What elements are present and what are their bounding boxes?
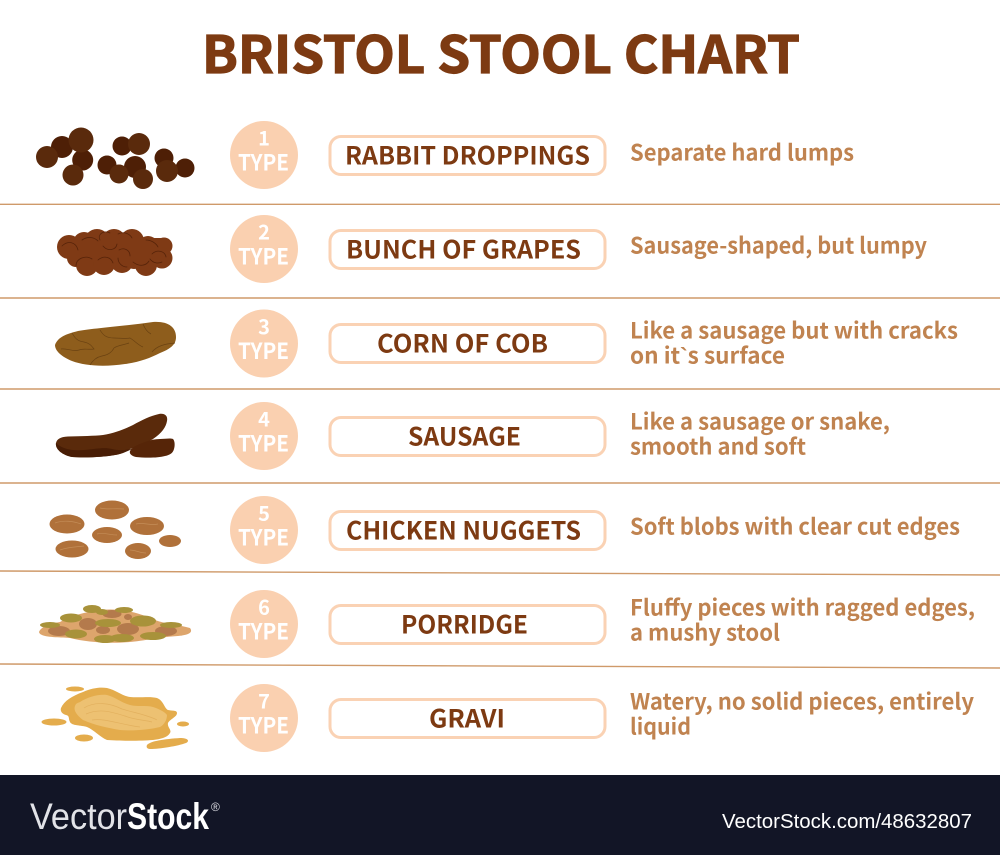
type badge 7: 7 xyxy=(258,686,270,714)
type badge 5: 5 xyxy=(258,498,270,526)
icon: soft blobs xyxy=(50,500,181,559)
row 4: sausage xyxy=(56,402,890,470)
row 3: corn of cob xyxy=(55,310,958,378)
icon: lumpy sausage xyxy=(57,229,172,276)
label: sausage xyxy=(330,418,605,456)
type badge 2: 2 xyxy=(258,216,270,246)
footer logo xyxy=(30,796,209,837)
type badge 4: 4 xyxy=(258,404,270,432)
description 5: Soft blobs with clear cut edges xyxy=(630,510,960,542)
type badge 7 xyxy=(230,684,298,752)
title: BRISTOL STOOL CHART xyxy=(202,14,800,88)
label: sausage: SAUSAGE xyxy=(408,418,521,454)
row 2: bunch of grapes xyxy=(57,215,927,283)
type badge 3: TYPE xyxy=(238,334,289,366)
type badge 3 xyxy=(230,310,298,378)
type badge 6 xyxy=(230,590,298,658)
description 3: Like a sausage but with cracks xyxy=(630,314,958,346)
icon: mushy pile xyxy=(39,605,191,643)
type badge 2: TYPE xyxy=(238,240,289,272)
description 4: smooth and soft xyxy=(630,430,807,462)
icon: liquid puddle xyxy=(42,686,189,749)
label: corn of cob: CORN OF COB xyxy=(377,324,548,360)
label: gravi: GRAVI xyxy=(429,700,505,736)
label: porridge: PORRIDGE xyxy=(401,606,528,642)
description 6: Fluffy pieces with ragged edges, xyxy=(630,590,975,622)
type badge 7: TYPE xyxy=(238,708,289,740)
label: bunch of grapes: BUNCH OF GRAPES xyxy=(346,230,581,266)
registered mark: ® xyxy=(211,800,220,814)
type badge 1 xyxy=(230,121,298,189)
label: gravi xyxy=(330,700,605,738)
icon: smooth sausage xyxy=(56,414,175,458)
type badge 4: TYPE xyxy=(238,426,289,458)
description 6: a mushy stool xyxy=(630,616,780,648)
description 3 xyxy=(630,314,958,370)
icon: hard separate lumps xyxy=(36,128,194,189)
row 1: rabbit droppings xyxy=(36,121,854,189)
description 7: liquid xyxy=(630,710,691,742)
label: rabbit droppings: RABBIT DROPPINGS xyxy=(345,136,590,172)
description 7: Watery, no solid pieces, entirely xyxy=(630,684,974,716)
type badge 6: 6 xyxy=(258,592,270,620)
description 6 xyxy=(630,590,975,648)
label: corn of cob xyxy=(330,324,605,362)
label: chicken nuggets: CHICKEN NUGGETS xyxy=(346,512,581,548)
type badge 4 xyxy=(230,402,298,470)
footer image id: VectorStock.com/48632807 xyxy=(722,811,972,833)
description 7 xyxy=(630,684,974,742)
description 4 xyxy=(630,404,890,462)
icon: cracked sausage xyxy=(55,322,176,366)
type badge 1: TYPE xyxy=(238,146,289,178)
footer logo: Vector xyxy=(30,796,127,837)
description 1: Separate hard lumps xyxy=(630,136,854,168)
label: porridge xyxy=(330,606,605,644)
row 5: chicken nuggets xyxy=(50,496,960,564)
description 4: Like a sausage or snake, xyxy=(630,404,890,436)
type badge 6: TYPE xyxy=(238,614,289,646)
footer logo: Stock xyxy=(127,796,209,837)
row 7: gravi xyxy=(42,684,974,752)
type badge 2 xyxy=(230,215,298,283)
type badge 5 xyxy=(230,496,298,564)
description 2: Sausage-shaped, but lumpy xyxy=(630,228,927,260)
type badge 1: 1 xyxy=(258,122,270,152)
footer bar xyxy=(0,775,1000,855)
row 6: porridge xyxy=(39,590,975,658)
description 3: on it`s surface xyxy=(630,338,785,370)
type badge 3: 3 xyxy=(258,311,270,340)
type badge 5: TYPE xyxy=(238,520,289,552)
